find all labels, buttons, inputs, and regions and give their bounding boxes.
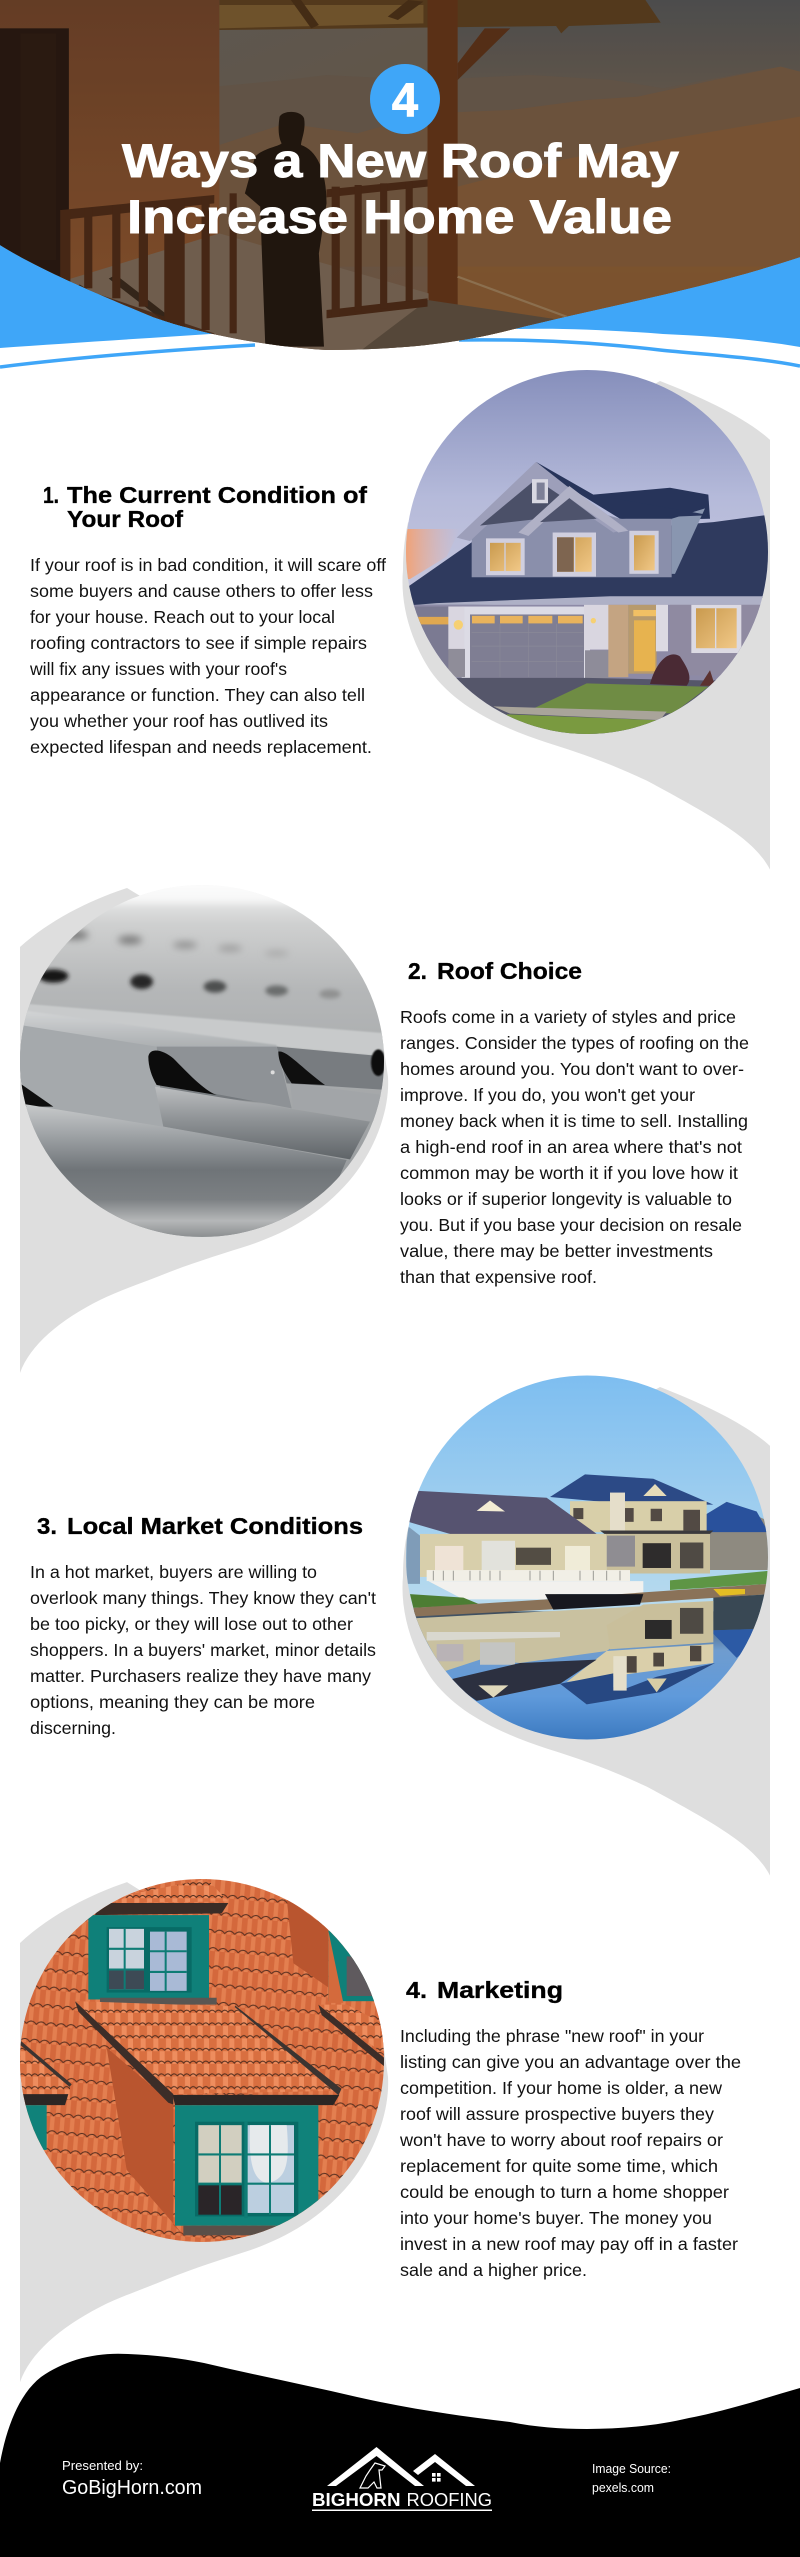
text block 4: invest in a new roof may pay off in a faster bbox=[400, 2234, 738, 2254]
text block 2: a high-end roof in an area where that's not bbox=[400, 1137, 742, 1157]
text block 3: shoppers. In a buyers' market, minor details bbox=[30, 1640, 376, 1660]
main title: Increase Home Value bbox=[127, 190, 672, 243]
heading 1: Your Roof bbox=[67, 506, 183, 532]
text block 2: money back when it is time to sell. Installing bbox=[400, 1111, 748, 1131]
text block 1: expected lifespan and needs replacement. bbox=[30, 737, 372, 757]
text block 4: competition. If your home is older, a new bbox=[400, 2078, 722, 2098]
photo: close-up of gray metal roofing bbox=[17, 880, 390, 1243]
heading 3: Local Market Conditions bbox=[67, 1513, 363, 1539]
photo: waterfront houses with reflection bbox=[400, 1370, 773, 1742]
footer: black wave bbox=[0, 2354, 800, 2557]
footer: image source: pexels.com bbox=[592, 2480, 654, 2495]
gray swoosh 2 bbox=[20, 888, 388, 1373]
logo icon: roofs, dog and window bbox=[327, 2447, 475, 2488]
footer: presented by: GoBigHorn.com bbox=[62, 2477, 202, 2499]
text block 2: ranges. Consider the types of roofing on the bbox=[400, 1033, 749, 1053]
text block 2: value, there may be better investments bbox=[400, 1241, 713, 1261]
text block 3: overlook many things. They know they can't bbox=[30, 1588, 376, 1608]
text block 3: discerning. bbox=[30, 1718, 116, 1738]
text block 1: you whether your roof has outlived its bbox=[30, 711, 328, 731]
photo: house at dusk bbox=[400, 367, 773, 739]
footer: presented by: Presented by: bbox=[62, 2458, 143, 2473]
text block 1: will fix any issues with your roof's bbox=[29, 659, 287, 679]
heading 2: Roof Choice bbox=[437, 958, 582, 984]
panel: section 4 bbox=[17, 1874, 390, 2382]
logo wordmark: BIGHORN bbox=[312, 2490, 400, 2510]
header: blue wave band bbox=[0, 230, 800, 348]
text block 2: looks or if superior longevity is valuable to bbox=[400, 1189, 732, 1209]
text block 4: listing can give you an advantage over the bbox=[400, 2052, 741, 2072]
text block 4: could be enough to turn a home shopper bbox=[400, 2182, 729, 2202]
logo wordmark bbox=[312, 2490, 492, 2511]
text block 2 bbox=[400, 1007, 749, 1287]
text block 2: improve. If you do, you won't get your bbox=[400, 1085, 695, 1105]
text block 3: matter. Purchasers realize they have many bbox=[30, 1666, 371, 1686]
photo: terracotta roof with teal dormers bbox=[17, 1874, 390, 2246]
logo wordmark: ROOFING bbox=[406, 2490, 492, 2510]
heading 4: 4. bbox=[406, 1977, 427, 2003]
footer: image source bbox=[592, 2461, 671, 2495]
heading 1: The Current Condition of bbox=[67, 482, 367, 508]
heading 1: 1. bbox=[43, 482, 59, 508]
footer: presented by bbox=[62, 2458, 202, 2499]
text block 3 bbox=[30, 1562, 376, 1738]
text block 1 bbox=[29, 555, 386, 757]
text block 2: common may be worth it if you love how it bbox=[400, 1163, 738, 1183]
text block 4: replacement for quite some time, which bbox=[400, 2156, 718, 2176]
main title bbox=[122, 134, 679, 243]
text block 4: roof will assure prospective buyers they bbox=[400, 2104, 714, 2124]
panel: section 2 bbox=[17, 880, 390, 1373]
heading 1 bbox=[43, 482, 367, 532]
footer: Bighorn Roofing logo bbox=[312, 2447, 492, 2511]
text block 1: roofing contractors to see if simple repairs bbox=[30, 633, 367, 653]
text block 2: you. But if you base your decision on resale bbox=[400, 1215, 742, 1235]
panel: section 3 bbox=[400, 1370, 773, 1876]
text block 4: Including the phrase "new roof" in your bbox=[400, 2026, 704, 2046]
text block 4: into your home's buyer. The money you bbox=[400, 2208, 712, 2228]
text block 1: appearance or function. They can also tell bbox=[30, 685, 365, 705]
text block 3: options, meaning they can be more bbox=[30, 1692, 315, 1712]
text block 2: homes around you. You don't want to over- bbox=[400, 1059, 744, 1079]
panel: section 1 bbox=[400, 367, 773, 870]
text block 1: If your roof is in bad condition, it will scare off bbox=[30, 555, 386, 575]
gray swoosh 3 bbox=[402, 1387, 770, 1876]
header: thin blue wave line bbox=[0, 340, 800, 367]
heading 3: 3. bbox=[37, 1513, 57, 1539]
gray swoosh 4 bbox=[20, 1882, 388, 2382]
header badge: number 4 bbox=[370, 64, 440, 134]
text block 1: some buyers and cause others to offer less bbox=[30, 581, 373, 601]
header badge: number 4: 4 bbox=[392, 73, 418, 126]
text block 3: be too picky, or they will lose out to other bbox=[30, 1614, 353, 1634]
text block 2: than that expensive roof. bbox=[400, 1267, 597, 1287]
heading 2: 2. bbox=[408, 958, 427, 984]
header photo: man on a porch overlooking mountains bbox=[0, 0, 800, 353]
heading 4: Marketing bbox=[437, 1977, 563, 2003]
main title: Ways a New Roof May bbox=[122, 134, 679, 187]
text block 4: sale and a higher price. bbox=[400, 2260, 587, 2280]
footer: image source: Image Source: bbox=[592, 2461, 671, 2476]
text block 1: for your house. Reach out to your local bbox=[30, 607, 335, 627]
text block 4 bbox=[399, 2026, 741, 2280]
text block 2: Roofs come in a variety of styles and price bbox=[400, 1007, 736, 1027]
gray swoosh 1 bbox=[402, 381, 770, 870]
text block 3: In a hot market, buyers are willing to bbox=[30, 1562, 317, 1582]
text block 4: won't have to worry about roof repairs or bbox=[399, 2130, 723, 2150]
